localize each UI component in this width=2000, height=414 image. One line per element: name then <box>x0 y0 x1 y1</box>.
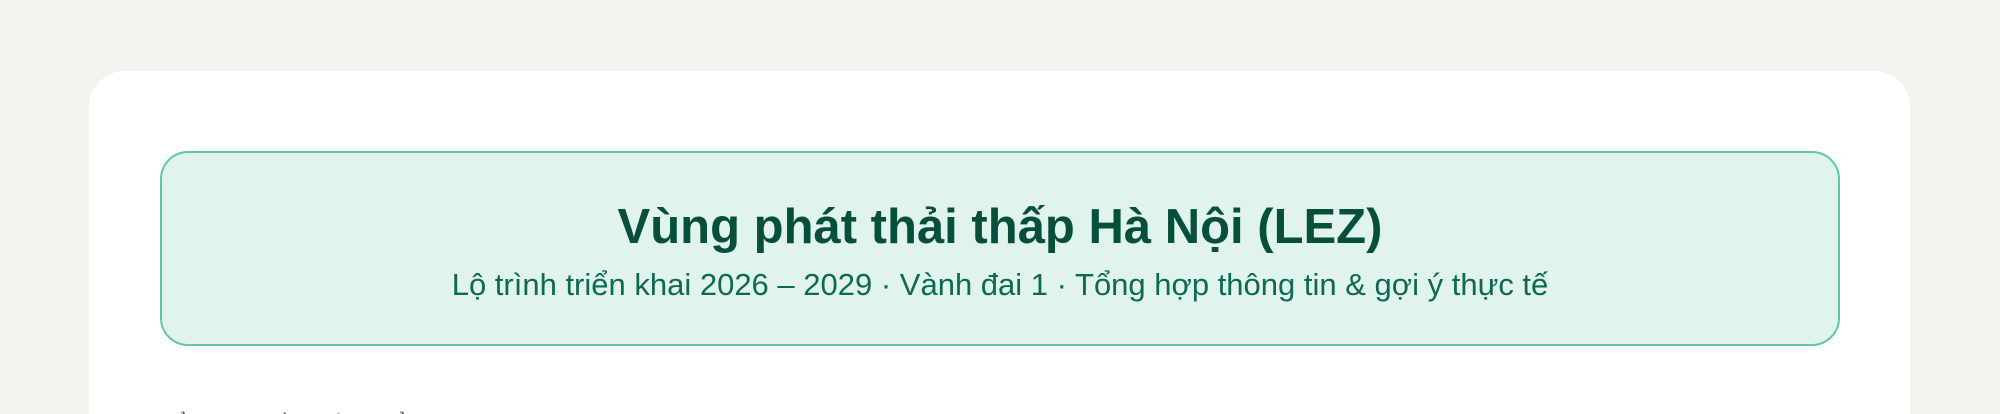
panel: main card <box>89 71 1910 414</box>
title: Vùng phát thải thấp Hà Nội (LEZ) <box>618 200 1382 254</box>
header banner <box>160 151 1840 346</box>
subtitle: Lộ trình triển khai 2026 – 2029 · Vành đai 1 · Tổng hợp thông tin & gợi ý thực tế <box>452 267 1548 302</box>
